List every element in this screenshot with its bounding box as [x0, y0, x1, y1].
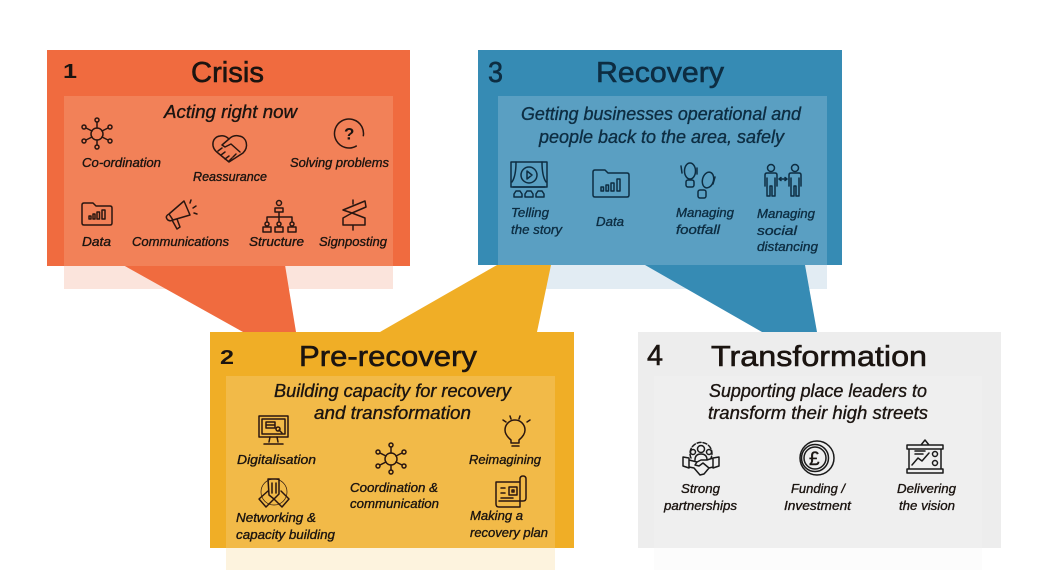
icon: structure chart — [263, 200, 296, 232]
label: coordination and communication — [350, 480, 439, 511]
panel: recovery — [478, 50, 842, 265]
icon: social distancing — [765, 164, 801, 196]
icon: question mark — [329, 114, 369, 153]
panel: transformation shadow — [654, 540, 982, 570]
panel: crisis shadow — [64, 260, 393, 289]
icon: heart handshake — [213, 136, 246, 162]
label: coordination and communication: Coordination & — [350, 480, 438, 495]
label: managing footfall: footfall — [676, 222, 721, 237]
icon: pound coin — [800, 441, 834, 475]
icon: data folder — [593, 170, 629, 197]
subheading: recovery: people back to the area, safely — [538, 127, 785, 147]
label: communications: Communications — [132, 234, 229, 249]
panel: transformation — [638, 332, 1001, 548]
heading: transformation: Transformation — [711, 341, 927, 373]
subheading: pre-recovery: and transformation — [314, 403, 471, 423]
subheading: recovery — [521, 104, 802, 147]
label: making a recovery plan — [470, 508, 548, 540]
icon: data folder — [82, 203, 112, 225]
icon: megaphone — [166, 200, 197, 229]
icon: coordination network — [376, 443, 406, 474]
icon: co-ordination network — [82, 118, 112, 149]
label: funding / investment — [784, 481, 852, 513]
label: telling the story — [511, 205, 564, 237]
label: managing footfall: Managing — [676, 205, 735, 220]
icon: question mark: ? — [344, 124, 354, 144]
subheading: transformation: Supporting place leaders to — [709, 381, 927, 401]
heading: pre-recovery: Pre-recovery — [299, 341, 478, 373]
label: reassurance: Reassurance — [193, 169, 267, 184]
label: strong partnerships: Strong — [681, 481, 721, 496]
label: making a recovery plan: Making a — [470, 508, 523, 523]
label: managing social distancing: Managing — [757, 206, 816, 221]
panel: recovery shadow — [498, 260, 827, 289]
subheading: transformation — [708, 381, 928, 423]
label: telling the story: Telling — [511, 205, 550, 220]
label: data: Data — [82, 234, 111, 249]
icon: signpost — [343, 200, 366, 230]
subheading: recovery: Getting businesses operational and — [521, 104, 802, 124]
number 4: 4 — [647, 340, 663, 372]
heading: crisis: Crisis — [191, 57, 264, 89]
label: delivering the vision: Delivering — [897, 481, 957, 496]
panel: pre-recovery shadow — [226, 540, 555, 570]
icon: theatre screen — [511, 162, 547, 197]
number 3: 3 — [488, 57, 503, 89]
label: managing footfall — [676, 205, 735, 237]
number 1: 1 — [63, 61, 77, 83]
heading: recovery: Recovery — [596, 57, 725, 89]
icon: footprints — [681, 163, 715, 198]
label: making a recovery plan: recovery plan — [470, 525, 548, 540]
icon: pound coin: £ — [809, 449, 820, 470]
subheading: pre-recovery: Building capacity for recovery — [274, 381, 512, 401]
subheading: crisis: Acting right now — [163, 102, 298, 122]
label: signposting: Signposting — [319, 234, 388, 249]
label: strong partnerships: partnerships — [663, 498, 738, 513]
label: co-ordination: Co-ordination — [82, 155, 161, 170]
icon: light bulb — [503, 416, 530, 446]
label: managing social distancing — [757, 206, 819, 254]
icon: presentation board — [907, 440, 943, 473]
label: structure: Structure — [249, 234, 304, 249]
label: networking and capacity building: Networking & — [236, 510, 316, 525]
label: funding / investment: Funding / — [791, 481, 846, 496]
label: networking and capacity building — [236, 510, 336, 542]
label: data: Data — [596, 214, 624, 229]
label: managing social distancing: distancing — [757, 239, 819, 254]
panel: pre-recovery — [210, 332, 574, 548]
label: networking and capacity building: capacity building — [236, 527, 336, 542]
label: delivering the vision — [897, 481, 957, 513]
label: strong partnerships — [663, 481, 738, 513]
label: coordination and communication: communication — [350, 496, 439, 511]
panel: crisis — [47, 50, 410, 266]
icon: joined hands — [259, 479, 289, 507]
label: reimagining: Reimagining — [469, 452, 542, 467]
icon: blueprint — [496, 476, 526, 507]
arrow: recovery to pre-recovery — [380, 265, 551, 332]
label: delivering the vision: the vision — [899, 498, 955, 513]
label: managing social distancing: social — [757, 223, 798, 238]
subheading: pre-recovery — [274, 381, 512, 423]
arrow: recovery to transformation — [645, 265, 817, 332]
label: solving problems: Solving problems — [290, 155, 389, 170]
label: digitalisation: Digitalisation — [237, 452, 316, 467]
icon: strong partnerships — [683, 442, 719, 475]
label: telling the story: the story — [511, 222, 564, 237]
label: funding / investment: Investment — [784, 498, 852, 513]
arrow: crisis to pre-recovery — [123, 265, 296, 332]
icon: monitor — [259, 416, 288, 444]
subheading: transformation: transform their high streets — [708, 403, 928, 423]
number 2: 2 — [220, 347, 234, 369]
